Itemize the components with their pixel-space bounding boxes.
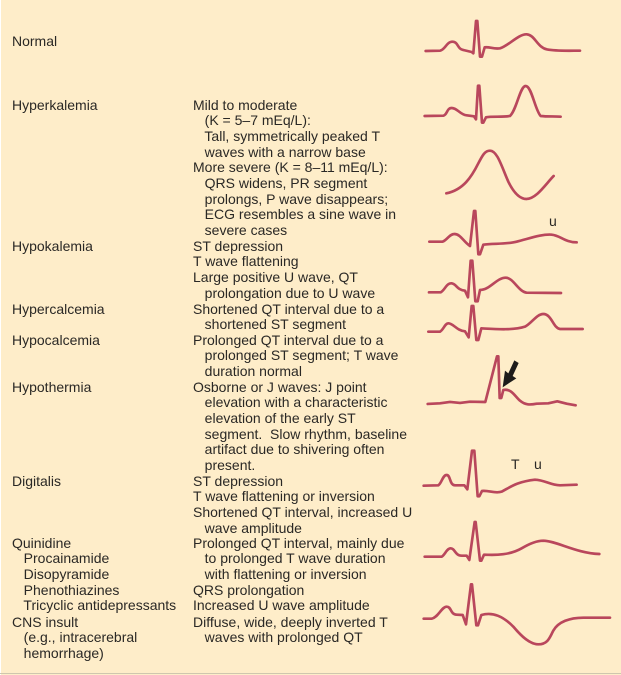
label: Hypocalcemia: Hypocalcemia: [12, 332, 100, 348]
description: CNS insult: Diffuse, wide, deeply inverted T waves with prolonged QT: [193, 614, 388, 645]
description: Quinidine: Prolonged QT interval, mainly due to prolonged T wave duration with flattening or inversion QRS prolongation Increased U wave amplitude: [193, 534, 404, 613]
description: Hypocalcemia: Prolonged QT interval due to a prolonged ST segment; T wave duration normal: [193, 332, 398, 379]
ECG: hypocalcemia: [428, 306, 583, 340]
ECG: hypothermia with J wave: [428, 356, 576, 405]
ECG: quinidine: [425, 522, 599, 561]
ECG: hyperkalemia severe sine wave: [446, 151, 554, 199]
icon: black arrow: [503, 360, 519, 387]
ECG: digitalis: [424, 451, 577, 496]
labels: T and u (digitalis): u: [534, 456, 542, 472]
ECG: normal: [426, 21, 580, 57]
description: Hypokalemia: ST depression T wave flattening Large positive U wave, QT prolongation due to U wave: [193, 238, 375, 301]
label: Digitalis: Digitalis: [12, 472, 61, 488]
ECG: CNS insult: [424, 584, 610, 644]
label: Hypothermia: Hypothermia: [12, 378, 91, 394]
bottom rule: [0, 673, 621, 674]
label: Normal: Normal: [12, 32, 57, 48]
label: CNS insult: CNS insult (e.g., intracerebral hemorrhage): [12, 614, 137, 661]
description: Hypercalcemia: Shortened QT interval due to a shortened ST segment: [193, 300, 384, 332]
label: u (hypokalemia): u: [549, 213, 557, 229]
label: Hypercalcemia: Hypercalcemia: [12, 300, 105, 316]
ECG: hyperkalemia mild: [425, 86, 561, 123]
label: Hyperkalemia: Hyperkalemia: [12, 96, 98, 112]
description: Hypothermia: Osborne or J waves: J point elevation with a characteristic elevation of the early ST segment. Slow rhythm, baseline artifact due to shivering often present.: [193, 378, 407, 473]
description: Digitalis: ST depression T wave flattening or inversion Shortened QT interval, increased U wave amplitude: [193, 472, 412, 536]
label: Hypokalemia: Hypokalemia: [12, 238, 93, 254]
label: Quinidine and related drugs: Quinidine Procainamide Disopyramide Phenothiazines Tricyclic antidepressants: [12, 534, 176, 613]
ECG: hypercalcemia: [429, 261, 561, 301]
ECG: hypokalemia: [429, 211, 577, 254]
labels: T and u (digitalis): T: [511, 456, 520, 472]
left edge strip: [0, 0, 1, 675]
description: Hyperkalemia: Mild to moderate (K = 5–7 mEq/L): Tall, symmetrically peaked T waves with a narrow base More severe (K = 8–11 mEq/L): QRS widens, PR segment prolongs, P wave disappears; ECG resembles a sine wave in severe cases: [193, 96, 396, 238]
labels: T and u (digitalis): [511, 456, 542, 472]
